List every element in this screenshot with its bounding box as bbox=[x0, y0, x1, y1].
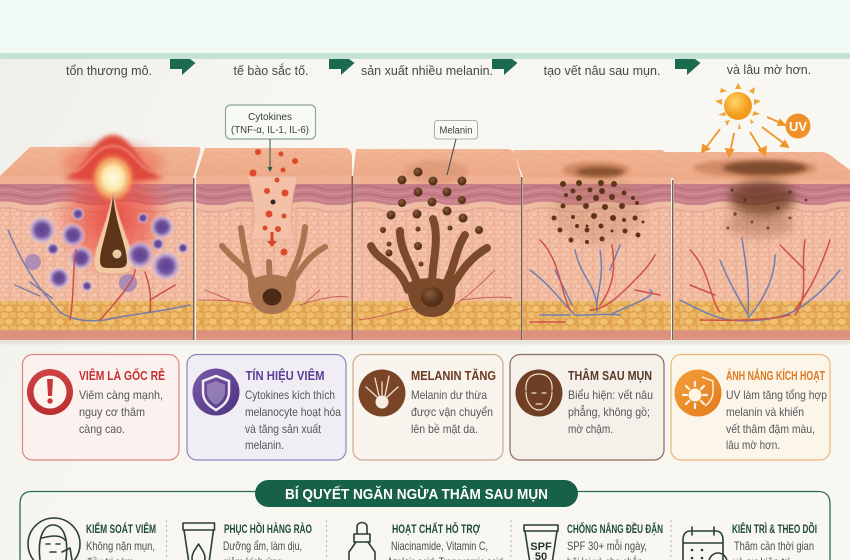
card 5: sunlight trigger: UV làm tăng tổng hợp bbox=[726, 388, 827, 402]
tip 4: sunscreen: SPF bbox=[530, 541, 552, 553]
card 1: inflammation: VIÊM LÀ GỐC RỄ bbox=[79, 368, 165, 383]
skin block 1: inflamed acne bbox=[0, 132, 200, 340]
callout: melanin: Melanin bbox=[440, 126, 472, 136]
card 3: melanin rise: lên bề mặt da. bbox=[411, 422, 478, 436]
tips heading banner: BÍ QUYẾT NGĂN NGỪA THÂM SAU MỤN bbox=[285, 485, 548, 503]
melanocyte bbox=[371, 219, 487, 317]
icon: warning bbox=[27, 369, 73, 415]
captions row: tế bào sắc tố. bbox=[233, 63, 309, 78]
card 4: post-acne mark bbox=[510, 354, 664, 460]
vessels bbox=[530, 240, 660, 322]
skin block 3: melanin increases bbox=[353, 149, 521, 340]
tip 4: sunscreen: CHỐNG NẮNG ĐỀU ĐẶN bbox=[567, 521, 663, 536]
card 1: inflammation bbox=[22, 354, 179, 460]
card 3: melanin rise bbox=[353, 354, 503, 460]
card 3: melanin rise: MELANIN TĂNG bbox=[411, 368, 496, 383]
card 2: inflammatory signal: TÍN HIỆU VIÊM bbox=[246, 368, 324, 383]
tip 5: persistence: Thâm cần thời gian bbox=[734, 539, 814, 553]
header band bbox=[0, 0, 850, 59]
immune cells bbox=[25, 207, 189, 292]
block ground shadow bbox=[0, 340, 850, 344]
inflammation bump bbox=[62, 135, 166, 204]
card 5: sunlight trigger: melanin và khiến bbox=[726, 405, 804, 419]
hair follicle bbox=[94, 193, 133, 274]
skin block 2: cytokine signal bbox=[196, 148, 352, 340]
icon: face bbox=[516, 370, 562, 416]
icon: calendar bbox=[683, 527, 727, 560]
dermal vessels bbox=[198, 290, 348, 305]
melanocyte bbox=[222, 227, 325, 314]
cytokine particles bbox=[250, 149, 298, 256]
card 2: inflammatory signal: Cytokines kích thích bbox=[245, 388, 335, 402]
card 2: inflammatory signal: melanocyte hoạt hóa bbox=[245, 405, 341, 419]
melanin dots bbox=[552, 180, 644, 244]
callout: melanin bbox=[434, 120, 478, 175]
card 1: inflammation: nguy cơ thâm bbox=[79, 405, 145, 419]
callout: cytokines bbox=[226, 105, 316, 172]
captions row: tổn thương mô. bbox=[66, 64, 152, 78]
icon: dropper bottle bbox=[349, 522, 375, 560]
icon: sun with UV rays bbox=[702, 83, 810, 156]
captions row bbox=[66, 63, 811, 78]
callout: cytokines: (TNF-α, IL-1, IL-6) bbox=[231, 125, 309, 136]
captions row: sản xuất nhiều melanin. bbox=[361, 64, 493, 78]
tip 2: repair barrier: PHỤC HỒI HÀNG RÀO bbox=[224, 521, 312, 536]
icon: sun with UV rays: UV bbox=[789, 119, 807, 134]
icon: tube bbox=[183, 523, 214, 560]
card 2: inflammatory signal: và tăng sản xuất bbox=[245, 422, 322, 436]
tip 3: active ingredients: HOẠT CHẤT HỖ TRỢ bbox=[392, 521, 481, 536]
tip 4: sunscreen bbox=[524, 521, 663, 560]
flow arrows bbox=[170, 59, 700, 75]
dermal vessels bbox=[358, 270, 512, 320]
tip 2: repair barrier bbox=[183, 521, 312, 560]
icon: shield bbox=[192, 368, 240, 416]
callout: cytokines: Cytokines bbox=[248, 112, 292, 123]
tips heading banner bbox=[255, 480, 578, 507]
tip 4: sunscreen: SPF 30+ mỗi ngày, bbox=[567, 538, 647, 553]
vessels bbox=[680, 238, 840, 321]
icon: sun and shield bbox=[674, 370, 722, 416]
tip 5: persistence bbox=[683, 521, 817, 560]
card 4: post-acne mark: mờ chậm. bbox=[568, 422, 613, 436]
tip 1: control inflammation bbox=[28, 518, 156, 560]
skin block 4: post-acne mark bbox=[513, 150, 672, 340]
icon: face bbox=[28, 518, 80, 560]
tips panel bbox=[20, 480, 830, 560]
card 5: sunlight trigger bbox=[671, 354, 830, 460]
card 4: post-acne mark: Biểu hiện: vết nâu bbox=[568, 388, 653, 402]
dark surface patch bbox=[693, 159, 817, 237]
tip 2: repair barrier: Dưỡng ẩm, làm dịu, bbox=[223, 539, 302, 553]
card 5: sunlight trigger: vết thâm đậm màu, bbox=[726, 422, 815, 436]
vessels bbox=[8, 230, 190, 321]
icon: melanocyte bbox=[358, 370, 406, 416]
surface spot bbox=[552, 162, 644, 244]
card 5: sunlight trigger: lâu mờ hơn. bbox=[726, 438, 780, 452]
card 1: inflammation: càng cao. bbox=[79, 422, 125, 436]
card 3: melanin rise: được vận chuyển bbox=[411, 405, 493, 419]
card 1: inflammation: Viêm càng mạnh, bbox=[79, 388, 163, 402]
skin block 5: sun-darkened mark bbox=[664, 152, 850, 340]
tip 3: active ingredients: Niacinamide, Vitamin C, bbox=[391, 539, 488, 553]
icon: SPF tube bbox=[524, 525, 558, 560]
tip 1: control inflammation: Không nặn mụn, bbox=[86, 539, 155, 553]
block seams bbox=[193, 176, 674, 340]
card 2: inflammatory signal bbox=[187, 354, 346, 460]
card 3: melanin rise: Melanin dư thừa bbox=[411, 388, 487, 402]
card 4: post-acne mark: THÂM SAU MỤN bbox=[568, 368, 652, 383]
captions row: và lâu mờ hơn. bbox=[727, 63, 811, 77]
card 2: inflammatory signal: melanin. bbox=[245, 438, 284, 452]
tip 1: control inflammation: KIỂM SOÁT VIÊM bbox=[86, 521, 156, 536]
signal channel bbox=[247, 176, 298, 240]
captions row: tạo vết nâu sau mụn. bbox=[544, 64, 660, 78]
card 4: post-acne mark: phẳng, không gồ; bbox=[568, 404, 650, 419]
melanin granules bbox=[380, 168, 483, 266]
tip 3: active ingredients bbox=[349, 521, 503, 560]
